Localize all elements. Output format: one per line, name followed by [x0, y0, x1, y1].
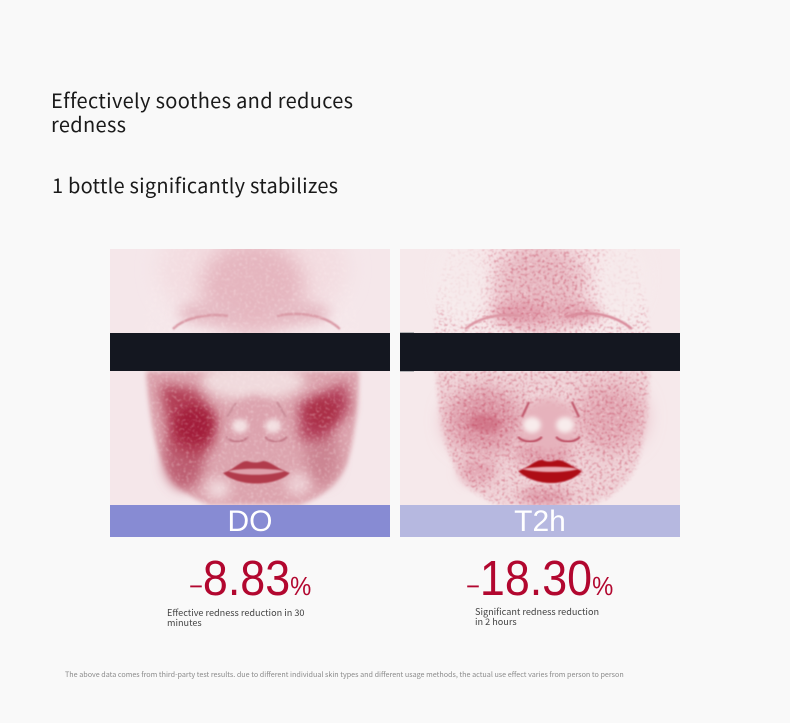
face redness map: D0: [110, 249, 390, 505]
lower face base: [436, 371, 649, 505]
heading: effectively soothes and reduces redness: [51, 85, 353, 138]
skin texture: [150, 252, 356, 504]
skin speckle: [434, 249, 651, 505]
lips: [223, 461, 290, 484]
heading: effectively soothes and reduces redness: Effectively soothes and reduces: [51, 85, 353, 114]
subheading: 1 bottle significantly stabilizes: 1 bottle significantly stabilizes: [52, 170, 338, 199]
panel: D0 before photo: [110, 249, 390, 538]
label: DO: DO: [228, 505, 272, 538]
heading: effectively soothes and reduces redness: redness: [51, 109, 126, 138]
caption: 2 hours: in 2 hours: [475, 614, 517, 628]
face redness map: T2h: [400, 249, 680, 505]
lips: [518, 460, 582, 483]
stat: -18.30%: −18.30%: [466, 552, 613, 606]
label: T2h: T2h: [514, 505, 566, 538]
lower face base: [146, 371, 359, 505]
panel: T2h after photo: [400, 249, 680, 538]
caption: 30 minutes: Effective redness reduction in 30: [167, 605, 304, 619]
caption: 2 hours: [475, 604, 599, 628]
stat: -8.83%: −8.83%: [189, 552, 311, 606]
caption: 30 minutes: [167, 605, 304, 629]
privacy bar: [110, 333, 390, 371]
caption: 2 hours: Significant redness reduction: [475, 604, 599, 618]
caption: 30 minutes: minutes: [167, 615, 202, 629]
privacy bar: [400, 333, 680, 371]
label: DO: [110, 505, 390, 537]
privacy bar edge: [400, 332, 414, 372]
footnote disclaimer: The above data comes from third-party test results. due to different individual skin types and different usage methods, the actual use effect varies from person to person: [65, 670, 624, 680]
label: T2h: [400, 505, 680, 537]
